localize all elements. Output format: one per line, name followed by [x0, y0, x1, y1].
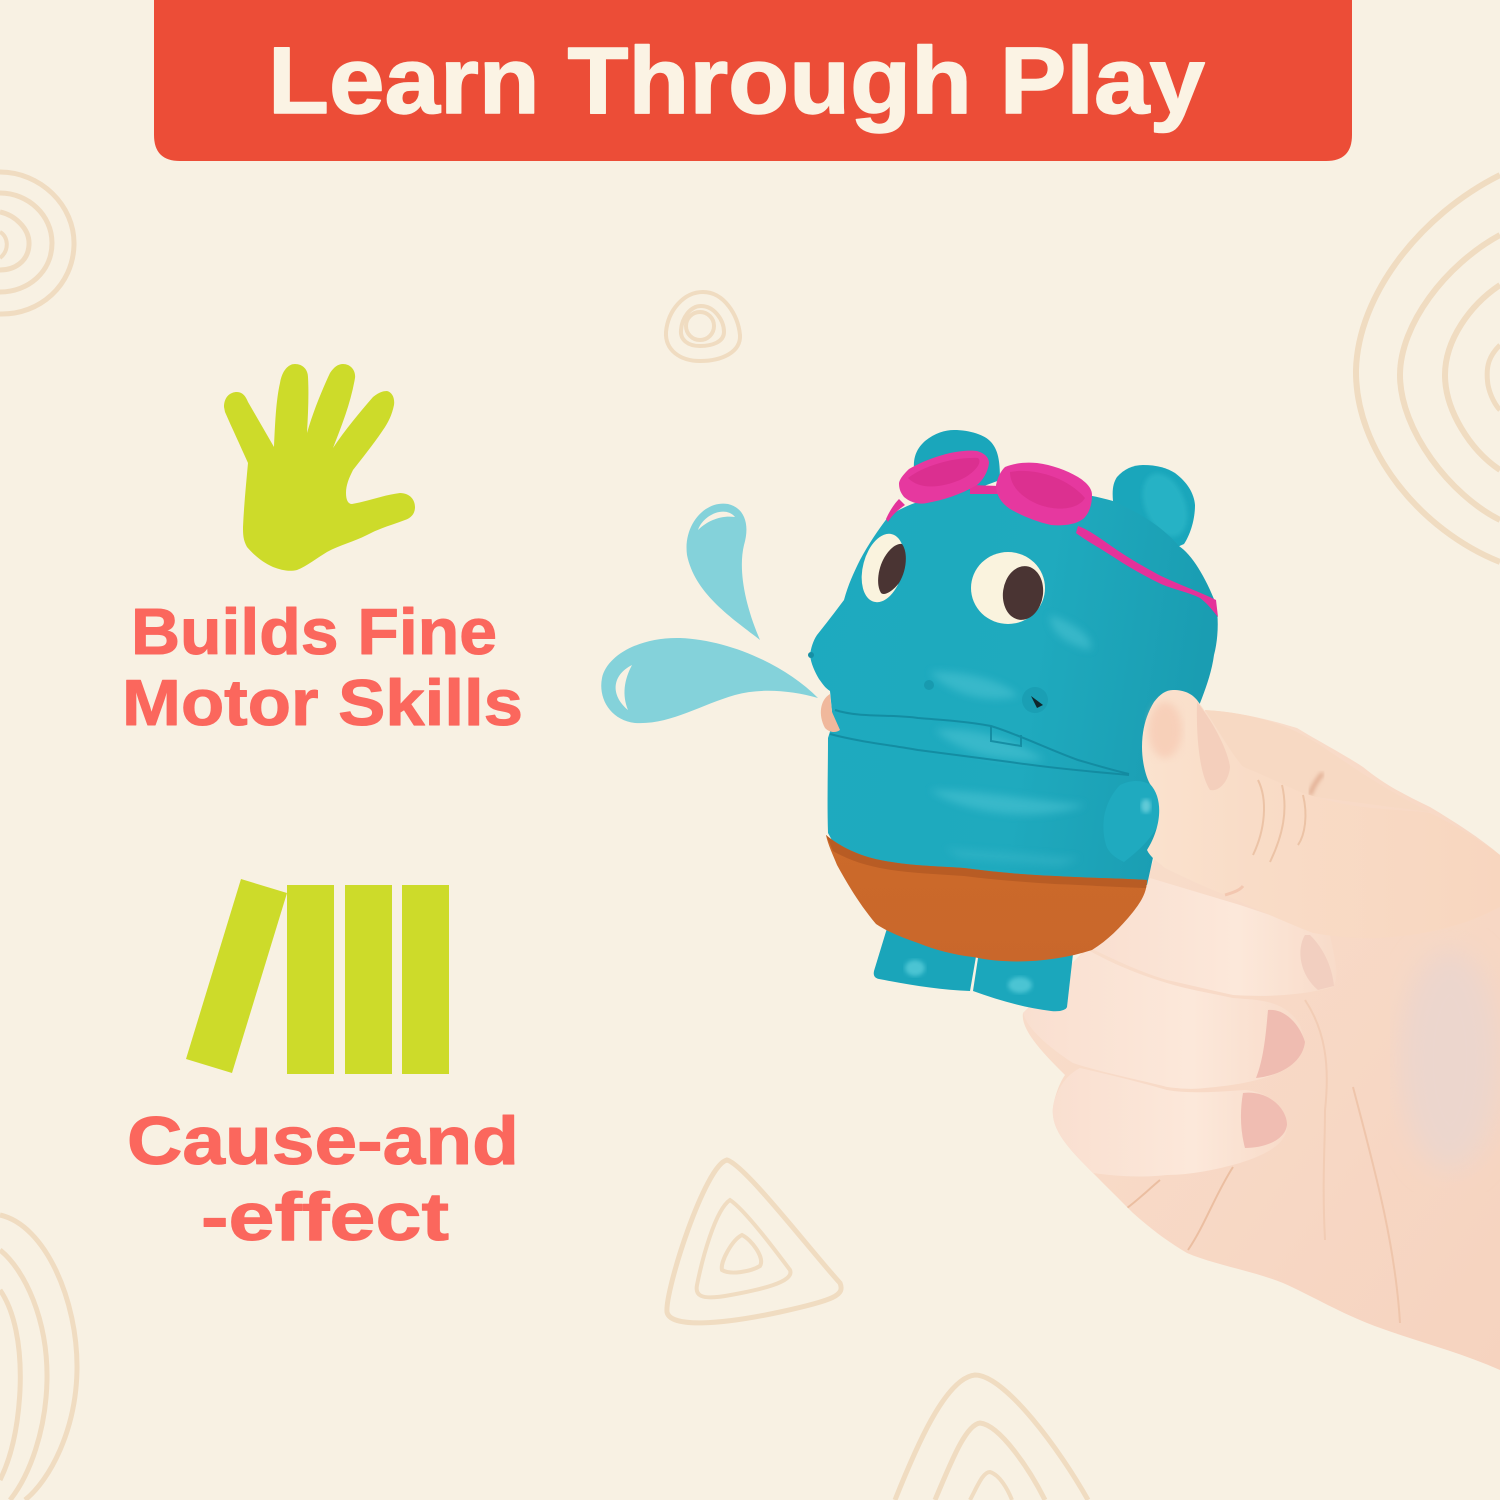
icon: books: [186, 879, 449, 1074]
title text: Learn Through Play: [268, 28, 1205, 134]
icon: water splash: [601, 504, 818, 723]
hippo ears: [914, 430, 1195, 548]
goggles: [886, 451, 1218, 617]
hippo shading highlights: [930, 615, 1091, 866]
icon: hand: [224, 364, 415, 571]
title banner: [154, 0, 1352, 161]
thumb tip blush: [1148, 702, 1182, 758]
photo: thumb: [1142, 690, 1500, 938]
hippo shorts: [826, 835, 1147, 961]
hippo body: [810, 488, 1218, 885]
palm shadow: [1408, 963, 1491, 1158]
label: cause-and-effect: Cause-and: [127, 1103, 519, 1179]
goggle strap: [886, 485, 1218, 617]
upper finger: [1108, 878, 1308, 996]
lower finger: [1056, 1068, 1266, 1176]
skin behind mouth: [821, 694, 840, 732]
hippo snout details: [924, 680, 934, 690]
label: cause-and-effect: [127, 1103, 519, 1255]
hippo left eye: [855, 529, 911, 607]
hippo right eye: [971, 552, 1047, 624]
label: builds fine motor skills: Builds Fine: [131, 595, 497, 668]
thumb nail: [1197, 702, 1230, 790]
back finger shading: [1206, 710, 1248, 716]
label: builds fine motor skills: Motor Skills: [122, 666, 523, 739]
middle finger: [1044, 951, 1270, 1089]
left lens: [899, 451, 989, 504]
label: cause-and-effect: -effect: [201, 1179, 449, 1255]
label: builds fine motor skills: [122, 595, 523, 739]
hippo mouth seam: [830, 710, 1129, 775]
photo: child hand: [1023, 710, 1500, 1370]
hippo feet: [874, 925, 1074, 1011]
right lens: [996, 463, 1092, 525]
photo: hippo toy: [808, 430, 1218, 1011]
hippo arm: [1103, 781, 1163, 862]
